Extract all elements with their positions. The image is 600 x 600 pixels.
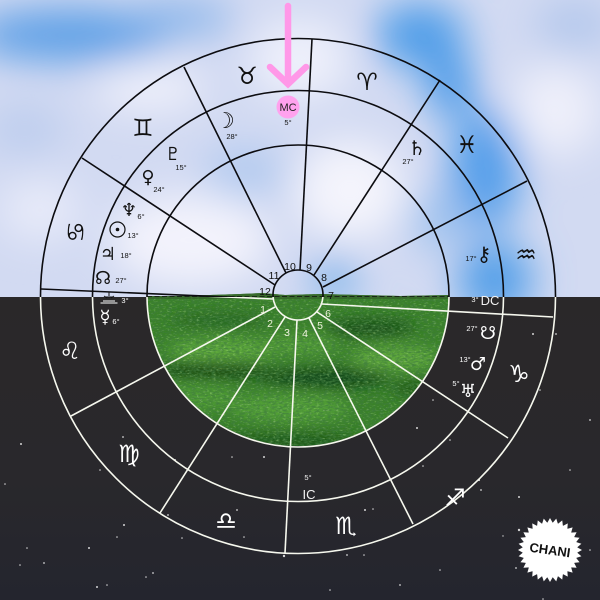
stars: [4, 333, 591, 600]
logo badge: CHANI: [529, 540, 571, 560]
planets: upper left: 27°: [115, 276, 127, 285]
planets: upper left: ☽: [215, 109, 235, 134]
zodiac signs: ♋︎: [61, 221, 89, 243]
house numbers: 10: [284, 261, 296, 273]
zodiac signs: ♓︎: [456, 131, 478, 159]
planets: upper left: ♇: [165, 144, 181, 165]
ascendant marker: 3°: [121, 296, 129, 305]
imum coeli: [302, 473, 316, 502]
imum coeli: 5°: [304, 473, 312, 482]
planets: upper left: 6°: [137, 212, 145, 221]
zodiac signs: ♏︎: [335, 512, 357, 540]
background: night sky: [0, 297, 600, 600]
house numbers: 7: [328, 290, 334, 302]
zodiac signs: ♉︎: [236, 62, 258, 90]
planets: right: 5°: [452, 379, 460, 388]
house numbers: 1: [260, 304, 266, 316]
planets: upper left: 15°: [175, 163, 187, 172]
house numbers: 9: [306, 262, 312, 274]
planets: right: 27°: [402, 157, 414, 166]
planets: upper left: 28°: [226, 132, 238, 141]
mercury: 6°: [112, 317, 120, 326]
house numbers: 11: [269, 270, 280, 282]
chart wheel: rings and house spokes: [40, 38, 556, 554]
ascendant marker: [100, 292, 129, 305]
photo: green grass hill: [148, 293, 448, 446]
midheaven marker: MC: [279, 102, 297, 114]
house numbers: 4: [302, 328, 308, 340]
planets: upper left: ♃: [100, 244, 116, 265]
zodiac signs: ♑︎: [508, 360, 530, 388]
planets: right: 17°: [465, 254, 477, 263]
planets: right: 3°: [471, 295, 479, 304]
planets: upper left: 18°: [120, 251, 132, 260]
mercury: ☿: [99, 307, 111, 328]
icon: sun: [110, 222, 125, 237]
midheaven marker: 5°: [284, 118, 292, 127]
house numbers: [259, 261, 334, 340]
planets: right: DC: [481, 293, 499, 308]
house numbers: 8: [321, 272, 327, 284]
planets: upper left: 24°: [153, 185, 165, 194]
zodiac signs: ♎︎: [215, 507, 237, 535]
zodiac signs: ♌︎: [59, 337, 81, 365]
arrow pointing at MC: [270, 6, 306, 84]
planets: right: ♅: [460, 381, 476, 402]
planets: upper left: [95, 109, 238, 289]
house numbers: 6: [325, 308, 331, 320]
planets: upper left: ♀: [141, 167, 155, 188]
planets: right: 27°: [466, 324, 478, 333]
logo badge: [518, 518, 582, 582]
house numbers: 2: [267, 318, 273, 330]
house numbers: 5: [317, 320, 323, 332]
planets: upper left: ♆: [121, 200, 137, 221]
planets: right: 13°: [459, 355, 471, 364]
planets: upper left: 13°: [127, 231, 139, 240]
imum coeli: IC: [302, 487, 316, 502]
midheaven marker: [276, 96, 300, 127]
house numbers: 12: [259, 286, 271, 298]
zodiac signs: ♊︎: [132, 114, 154, 142]
house numbers: 3: [284, 327, 290, 339]
planets: right: ♂: [470, 354, 486, 375]
zodiac signs: [59, 62, 537, 540]
planets: right: ☋: [480, 323, 496, 344]
mercury: [99, 307, 120, 328]
zodiac signs: ♈︎: [356, 68, 378, 96]
zodiac signs: ♒︎: [515, 241, 537, 269]
zodiac signs: ♐︎: [444, 484, 466, 512]
planets: right: ⚷: [477, 242, 491, 266]
planets: upper left: ☊: [95, 268, 111, 289]
zodiac signs: ♍︎: [118, 440, 140, 468]
planets: right: ♄: [408, 136, 426, 160]
background: cloudy sky: [0, 0, 600, 318]
planets: right: [402, 136, 499, 402]
